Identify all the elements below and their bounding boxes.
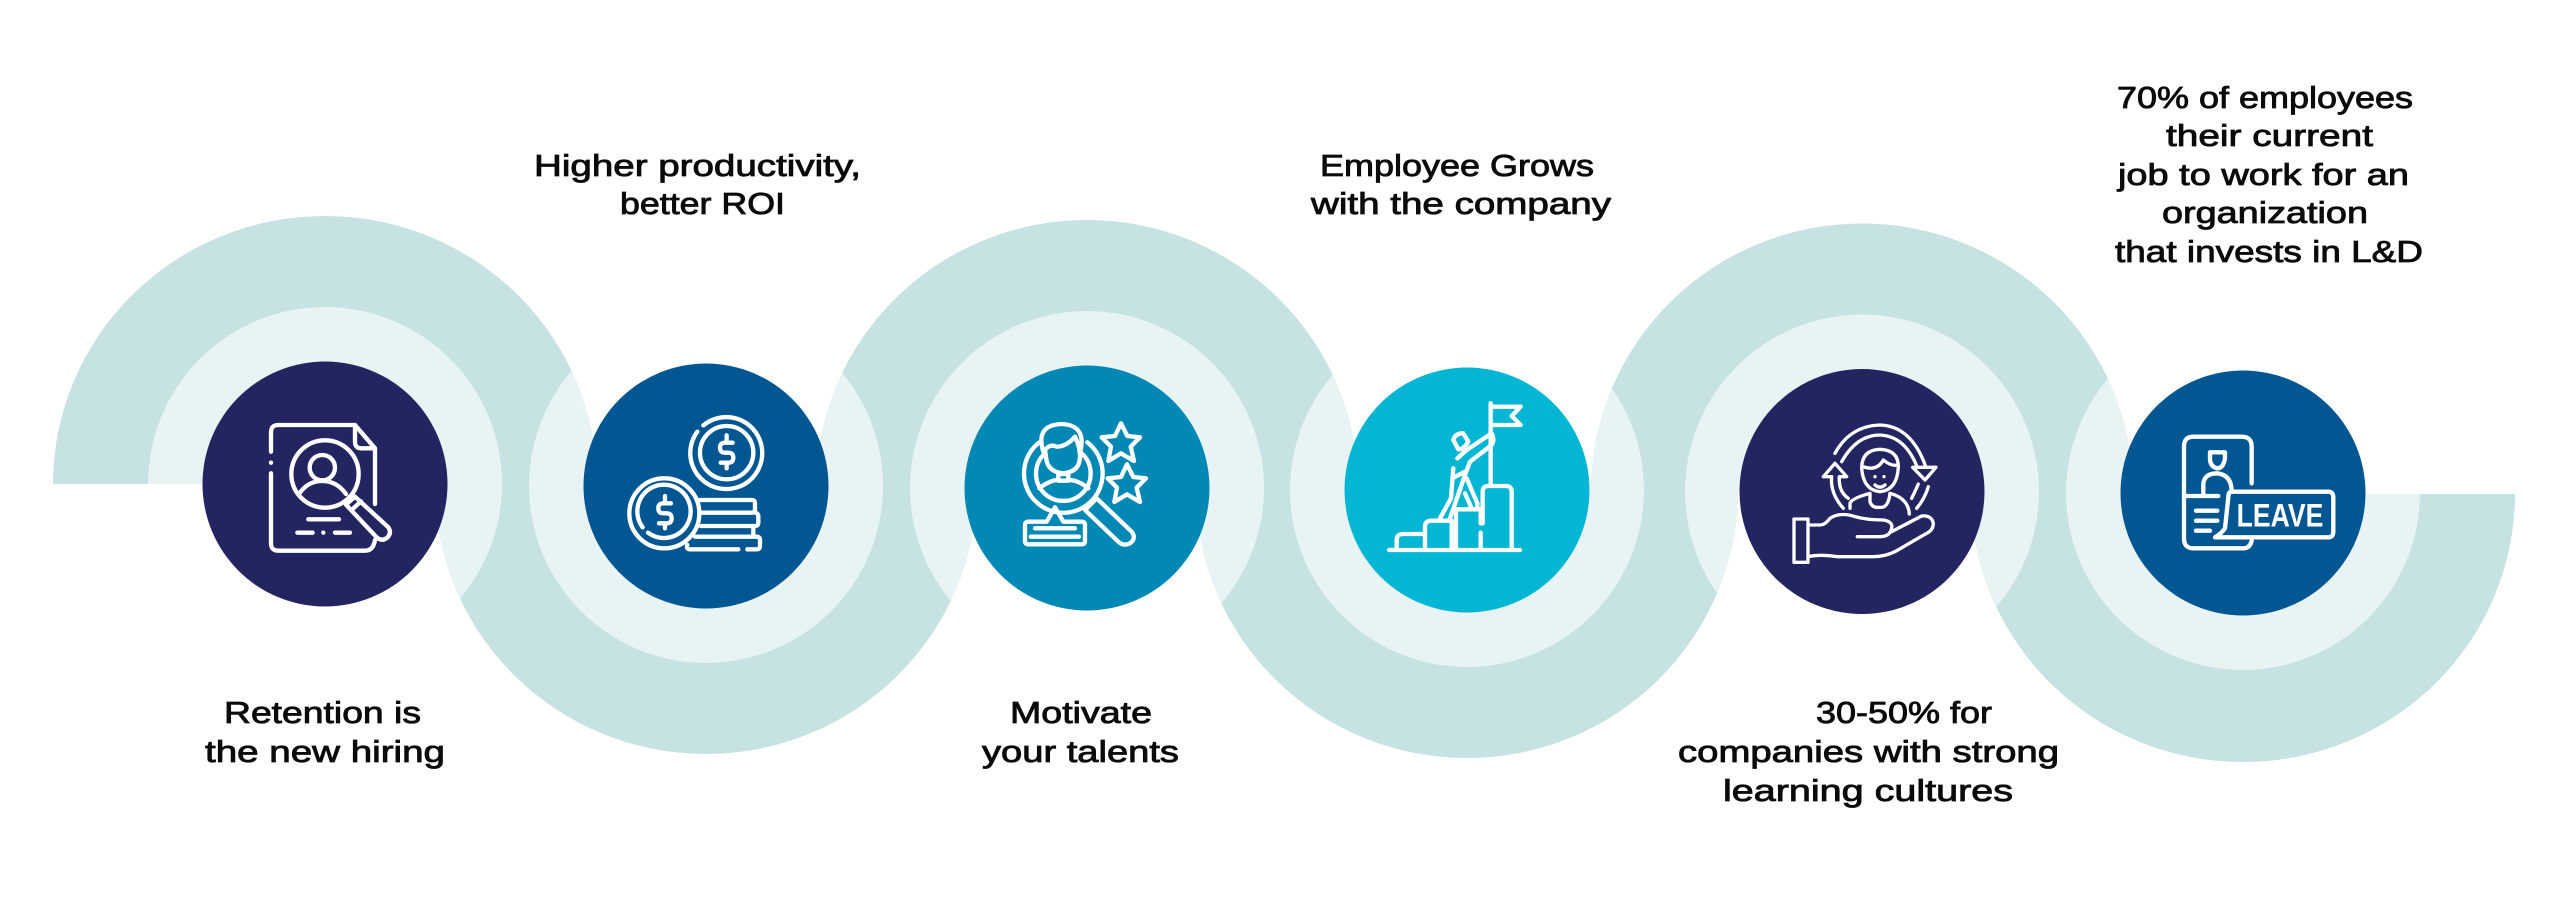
label: productivity (534, 148, 861, 221)
step 4 badge: growth (1344, 368, 1590, 612)
step 1 badge: resume search (202, 362, 448, 606)
icon: person in magnifier with stars (1024, 423, 1146, 545)
label: motivate: your talents (982, 734, 1179, 769)
label: learning cultures (1678, 695, 2059, 808)
step 2 badge: coins (584, 364, 828, 608)
icon: stacked dollar coins (629, 417, 762, 549)
icon: climber planting flag on steps (1389, 403, 1521, 550)
label: 70 percent of employees: job to work for an (2117, 157, 2409, 192)
label: 70 percent of employees: that invests in L&D (2115, 234, 2423, 269)
icon: profile card with LEAVE bubble: LEAVE (2237, 497, 2323, 534)
label: motivate (982, 695, 1179, 769)
label: productivity: Higher productivity, (534, 148, 861, 183)
step 3 badge: talent search (964, 366, 1210, 610)
label: 70 percent of employees (2115, 80, 2423, 269)
label: retention (205, 695, 445, 769)
label: productivity: better ROI (620, 186, 785, 221)
label: 70 percent of employees: their current (2166, 118, 2373, 153)
wave band: inner light halos (148, 307, 2420, 670)
label: motivate: Motivate (1010, 695, 1152, 730)
label: retention: the new hiring (205, 734, 445, 769)
label: 70 percent of employees: organization (2162, 195, 2368, 230)
step 6 badge: leave (2120, 370, 2366, 616)
icon: profile card with LEAVE bubble (2184, 437, 2333, 548)
label: retention: Retention is (224, 695, 421, 730)
step 5 badge: development (1740, 369, 1984, 614)
label: learning cultures: companies with strong (1678, 734, 2059, 769)
label: 70 percent of employees: 70% of employees (2117, 80, 2413, 115)
label: employee grows: Employee Grows (1320, 148, 1594, 183)
icon: hand holding person with cycle arrows (1794, 425, 1936, 562)
label: employee grows (1310, 148, 1612, 221)
wave band: outer teal ribbon (53, 216, 2515, 762)
label: learning cultures: learning cultures (1723, 773, 2013, 808)
icon: resume with magnifier (271, 425, 390, 551)
label: employee grows: with the company (1310, 186, 1612, 221)
label: learning cultures: 30-50% for (1816, 695, 1992, 730)
